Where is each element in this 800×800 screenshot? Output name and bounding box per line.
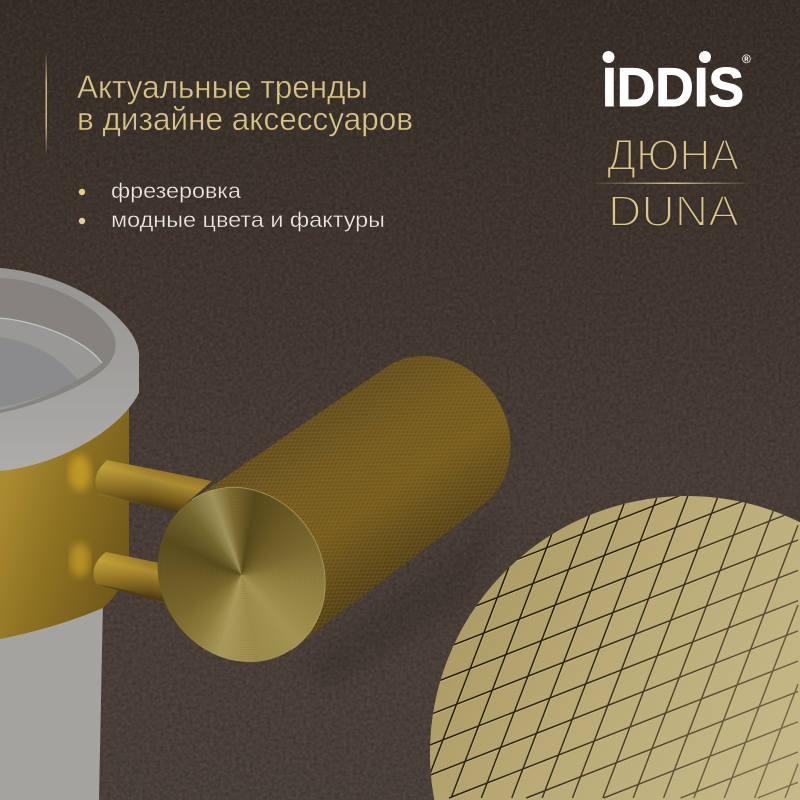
vertical gold rule <box>46 52 47 156</box>
collection name: Дюна / Duna: ДЮНА <box>607 131 740 180</box>
face rim highlight <box>192 455 359 650</box>
collection name: Дюна / Duna: DUNA <box>608 187 740 236</box>
heading: Актуальные тренды <box>77 69 368 105</box>
heading <box>77 69 413 137</box>
rim inner wall <box>0 278 116 413</box>
texture swatch circle <box>430 496 800 800</box>
logo: IDDIS: ® <box>742 52 751 66</box>
heading: в дизайне аксессуаров <box>77 101 413 137</box>
lattice highlights <box>430 496 799 800</box>
cup inner floor <box>0 318 102 410</box>
cylinder end face with radial brushing <box>124 455 359 695</box>
gold band holder <box>0 405 129 639</box>
wall shadow under holder <box>300 470 520 690</box>
bullet list <box>79 179 385 232</box>
glass cup body <box>0 600 103 800</box>
logo: IDDIS: IDDIS <box>602 57 744 118</box>
lattice grooves <box>430 496 799 799</box>
knurled cylinder <box>192 356 511 650</box>
collection name: Дюна / Duna <box>590 131 755 236</box>
upper pin <box>95 460 212 512</box>
diamond lattice <box>430 496 799 800</box>
bullet item: milling: фрезеровка <box>111 179 241 203</box>
lower pin <box>94 552 165 603</box>
glass rim <box>0 268 139 471</box>
bullet item: colours and textures: модные цвета и фактуры <box>111 208 385 232</box>
rim highlight <box>0 318 102 363</box>
